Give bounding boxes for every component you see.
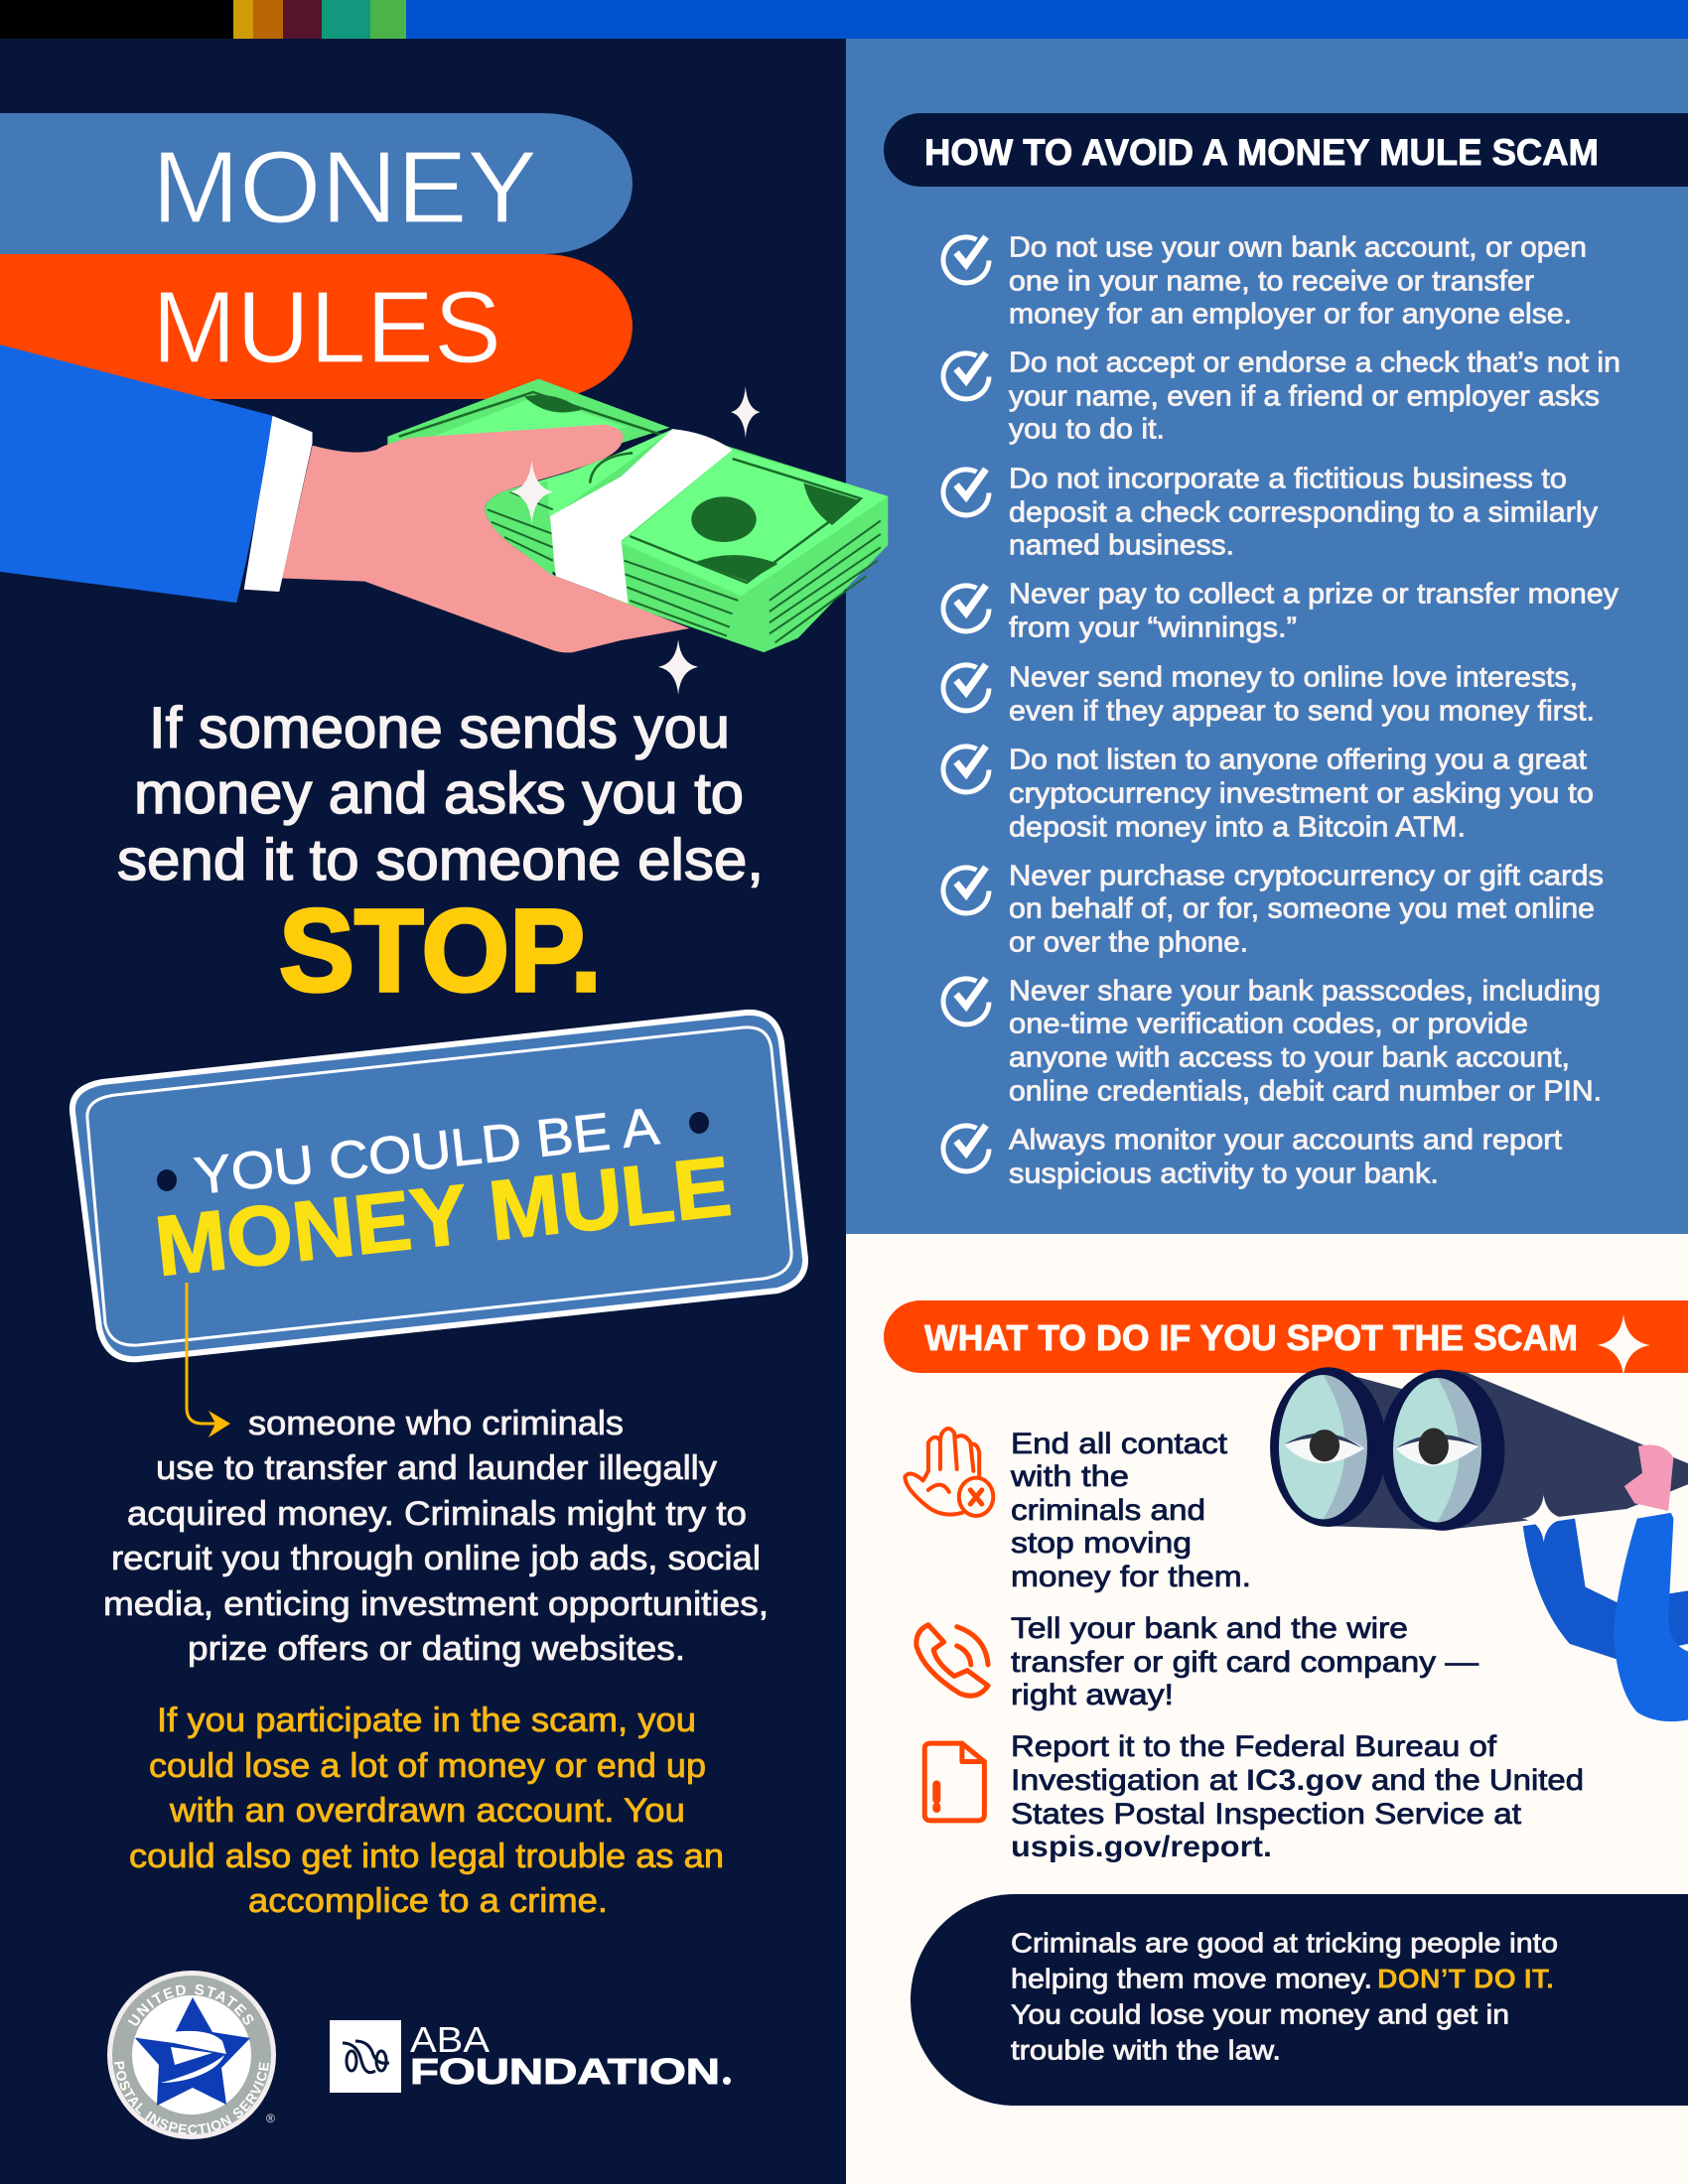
warning text: with an overdrawn account. You <box>169 1792 685 1830</box>
checklist: one in your name, to receive or transfer <box>1009 266 1534 298</box>
top colour bar <box>0 0 1688 39</box>
definition text: prize offers or dating websites. <box>188 1630 685 1668</box>
text: report it: Investigation at <box>1011 1764 1238 1797</box>
heading: how to avoid a money mule scam: HOW TO AVOID A MONEY MULE SCAM <box>924 132 1599 173</box>
callout: don't do it: You could lose your money and get in <box>1011 1999 1509 2029</box>
checklist: your name, even if a friend or employer asks <box>1009 381 1600 413</box>
warning text: could lose a lot of money or end up <box>149 1747 706 1785</box>
checklist: money for an employer or for anyone else. <box>1009 298 1572 330</box>
callout: don't do it: helping them move money. <box>1011 1964 1372 1993</box>
text: end all contact: money for them. <box>1011 1561 1251 1593</box>
icon: report file <box>924 1743 984 1821</box>
illustration: hand passing cash <box>0 344 888 695</box>
logo: postal inspection service seal <box>107 1971 276 2139</box>
checklist: Do not listen to anyone offering you a great <box>1009 745 1587 776</box>
heading: what to do if you spot the scam: WHAT TO DO IF YOU SPOT THE SCAM <box>924 1317 1578 1358</box>
text: report it: IC3.gov <box>1246 1764 1362 1797</box>
headline: STOP. <box>279 886 602 1017</box>
definition text: acquired money. Criminals might try to <box>127 1495 747 1533</box>
text: report it: Report it to the Federal Bureau of <box>1011 1730 1497 1763</box>
warning text: accomplice to a crime. <box>248 1882 608 1920</box>
title: money mules <box>0 113 633 399</box>
sign: you could be a money mule: YOU COULD BE A <box>192 1097 662 1206</box>
logo: aba foundation <box>330 2019 731 2093</box>
text: tell your bank: right away! <box>1011 1679 1174 1711</box>
checklist: even if they appear to send you money first. <box>1009 695 1595 727</box>
checklist <box>943 232 1620 1189</box>
text: report it: States Postal Inspection Service at <box>1011 1798 1522 1831</box>
logo: aba foundation: ABA <box>410 2019 490 2060</box>
checklist: cryptocurrency investment or asking you to <box>1009 778 1594 810</box>
checklist: deposit money into a Bitcoin ATM. <box>1009 812 1466 844</box>
panel: what to do <box>846 1234 1688 2184</box>
logo: postal inspection service seal: ® <box>266 2112 275 2125</box>
checklist: suspicious activity to your bank. <box>1009 1158 1439 1189</box>
headline <box>117 696 764 1017</box>
heading: what to do if you spot the scam <box>884 1300 1688 1376</box>
checklist: you to do it. <box>1009 413 1165 445</box>
checklist: Do not accept or endorse a check that’s not in <box>1009 347 1620 379</box>
callout: don't do it: DON’T DO IT. <box>1377 1964 1554 1993</box>
warning text <box>129 1702 724 1920</box>
arrow from sign to definition <box>187 1283 230 1437</box>
text: tell your bank: transfer or gift card company — <box>1011 1646 1478 1679</box>
text: end all contact <box>1010 1428 1251 1593</box>
text: end all contact: stop moving <box>1011 1527 1192 1560</box>
sign: you could be a money mule <box>72 1013 805 1359</box>
logo: postal inspection service seal: POSTAL INSPECTION SERVICE <box>114 2061 269 2134</box>
text: end all contact: End all contact <box>1011 1428 1228 1460</box>
checklist: online credentials, debit card number or PIN. <box>1009 1076 1602 1108</box>
sign: you could be a money mule: MONEY MULE <box>151 1140 736 1295</box>
definition text: recruit you through online job ads, social <box>111 1540 761 1577</box>
title: money mules: MULES <box>152 270 501 384</box>
checklist: from your “winnings.” <box>1009 612 1297 643</box>
checklist: one-time verification codes, or provide <box>1009 1009 1528 1040</box>
text: end all contact: criminals and <box>1011 1494 1205 1527</box>
checklist: Never share your bank passcodes, including <box>1009 975 1601 1007</box>
text: report it: and the United <box>1371 1764 1584 1797</box>
checklist: Never purchase cryptocurrency or gift cards <box>1009 860 1604 891</box>
definition text: media, enticing investment opportunities, <box>103 1585 769 1623</box>
text: report it: uspis.gov/report. <box>1011 1831 1272 1863</box>
icon: stop hand <box>905 1429 993 1516</box>
heading: how to avoid a money mule scam <box>884 113 1688 187</box>
headline: send it to someone else, <box>117 828 764 892</box>
warning text: If you participate in the scam, you <box>157 1702 696 1739</box>
checklist: Always monitor your accounts and report <box>1009 1124 1562 1156</box>
definition text <box>103 1405 769 1668</box>
icon: phone <box>916 1625 988 1696</box>
checklist: on behalf of, or for, someone you met online <box>1009 893 1595 925</box>
title: money mules: MONEY <box>152 130 537 244</box>
logo: aba foundation: FOUNDATION <box>410 2051 720 2092</box>
checklist: Never pay to collect a prize or transfer money <box>1009 578 1619 610</box>
illustration: binoculars and arms <box>1270 1367 1688 1721</box>
definition text: someone who criminals <box>248 1405 624 1442</box>
checklist: Never send money to online love interests, <box>1009 661 1578 693</box>
callout: don't do it: trouble with the law. <box>1011 2035 1281 2065</box>
headline: If someone sends you <box>149 696 730 760</box>
text: tell your bank: Tell your bank and the wire <box>1011 1612 1408 1645</box>
checklist: deposit a check corresponding to a similarly <box>1009 496 1599 528</box>
checklist: anyone with access to your bank account, <box>1009 1042 1570 1074</box>
headline: money and asks you to <box>134 761 744 826</box>
checklist: named business. <box>1009 530 1234 562</box>
definition text: use to transfer and launder illegally <box>156 1449 717 1487</box>
checklist: Do not use your own bank account, or open <box>1009 232 1587 264</box>
logo: postal inspection service seal: UNITED STATES <box>128 1983 254 2025</box>
text: tell your bank <box>1011 1612 1478 1711</box>
checklist: or over the phone. <box>1009 927 1248 959</box>
callout: don't do it: Criminals are good at tricking people into <box>1011 1928 1558 1958</box>
text: end all contact: with the <box>1010 1460 1129 1493</box>
panel: how to avoid <box>846 39 1688 1234</box>
warning text: could also get into legal trouble as an <box>129 1838 724 1875</box>
checklist: Do not incorporate a fictitious business to <box>1009 463 1567 494</box>
callout: don't do it <box>911 1894 1688 2106</box>
text: report it <box>1011 1730 1584 1863</box>
